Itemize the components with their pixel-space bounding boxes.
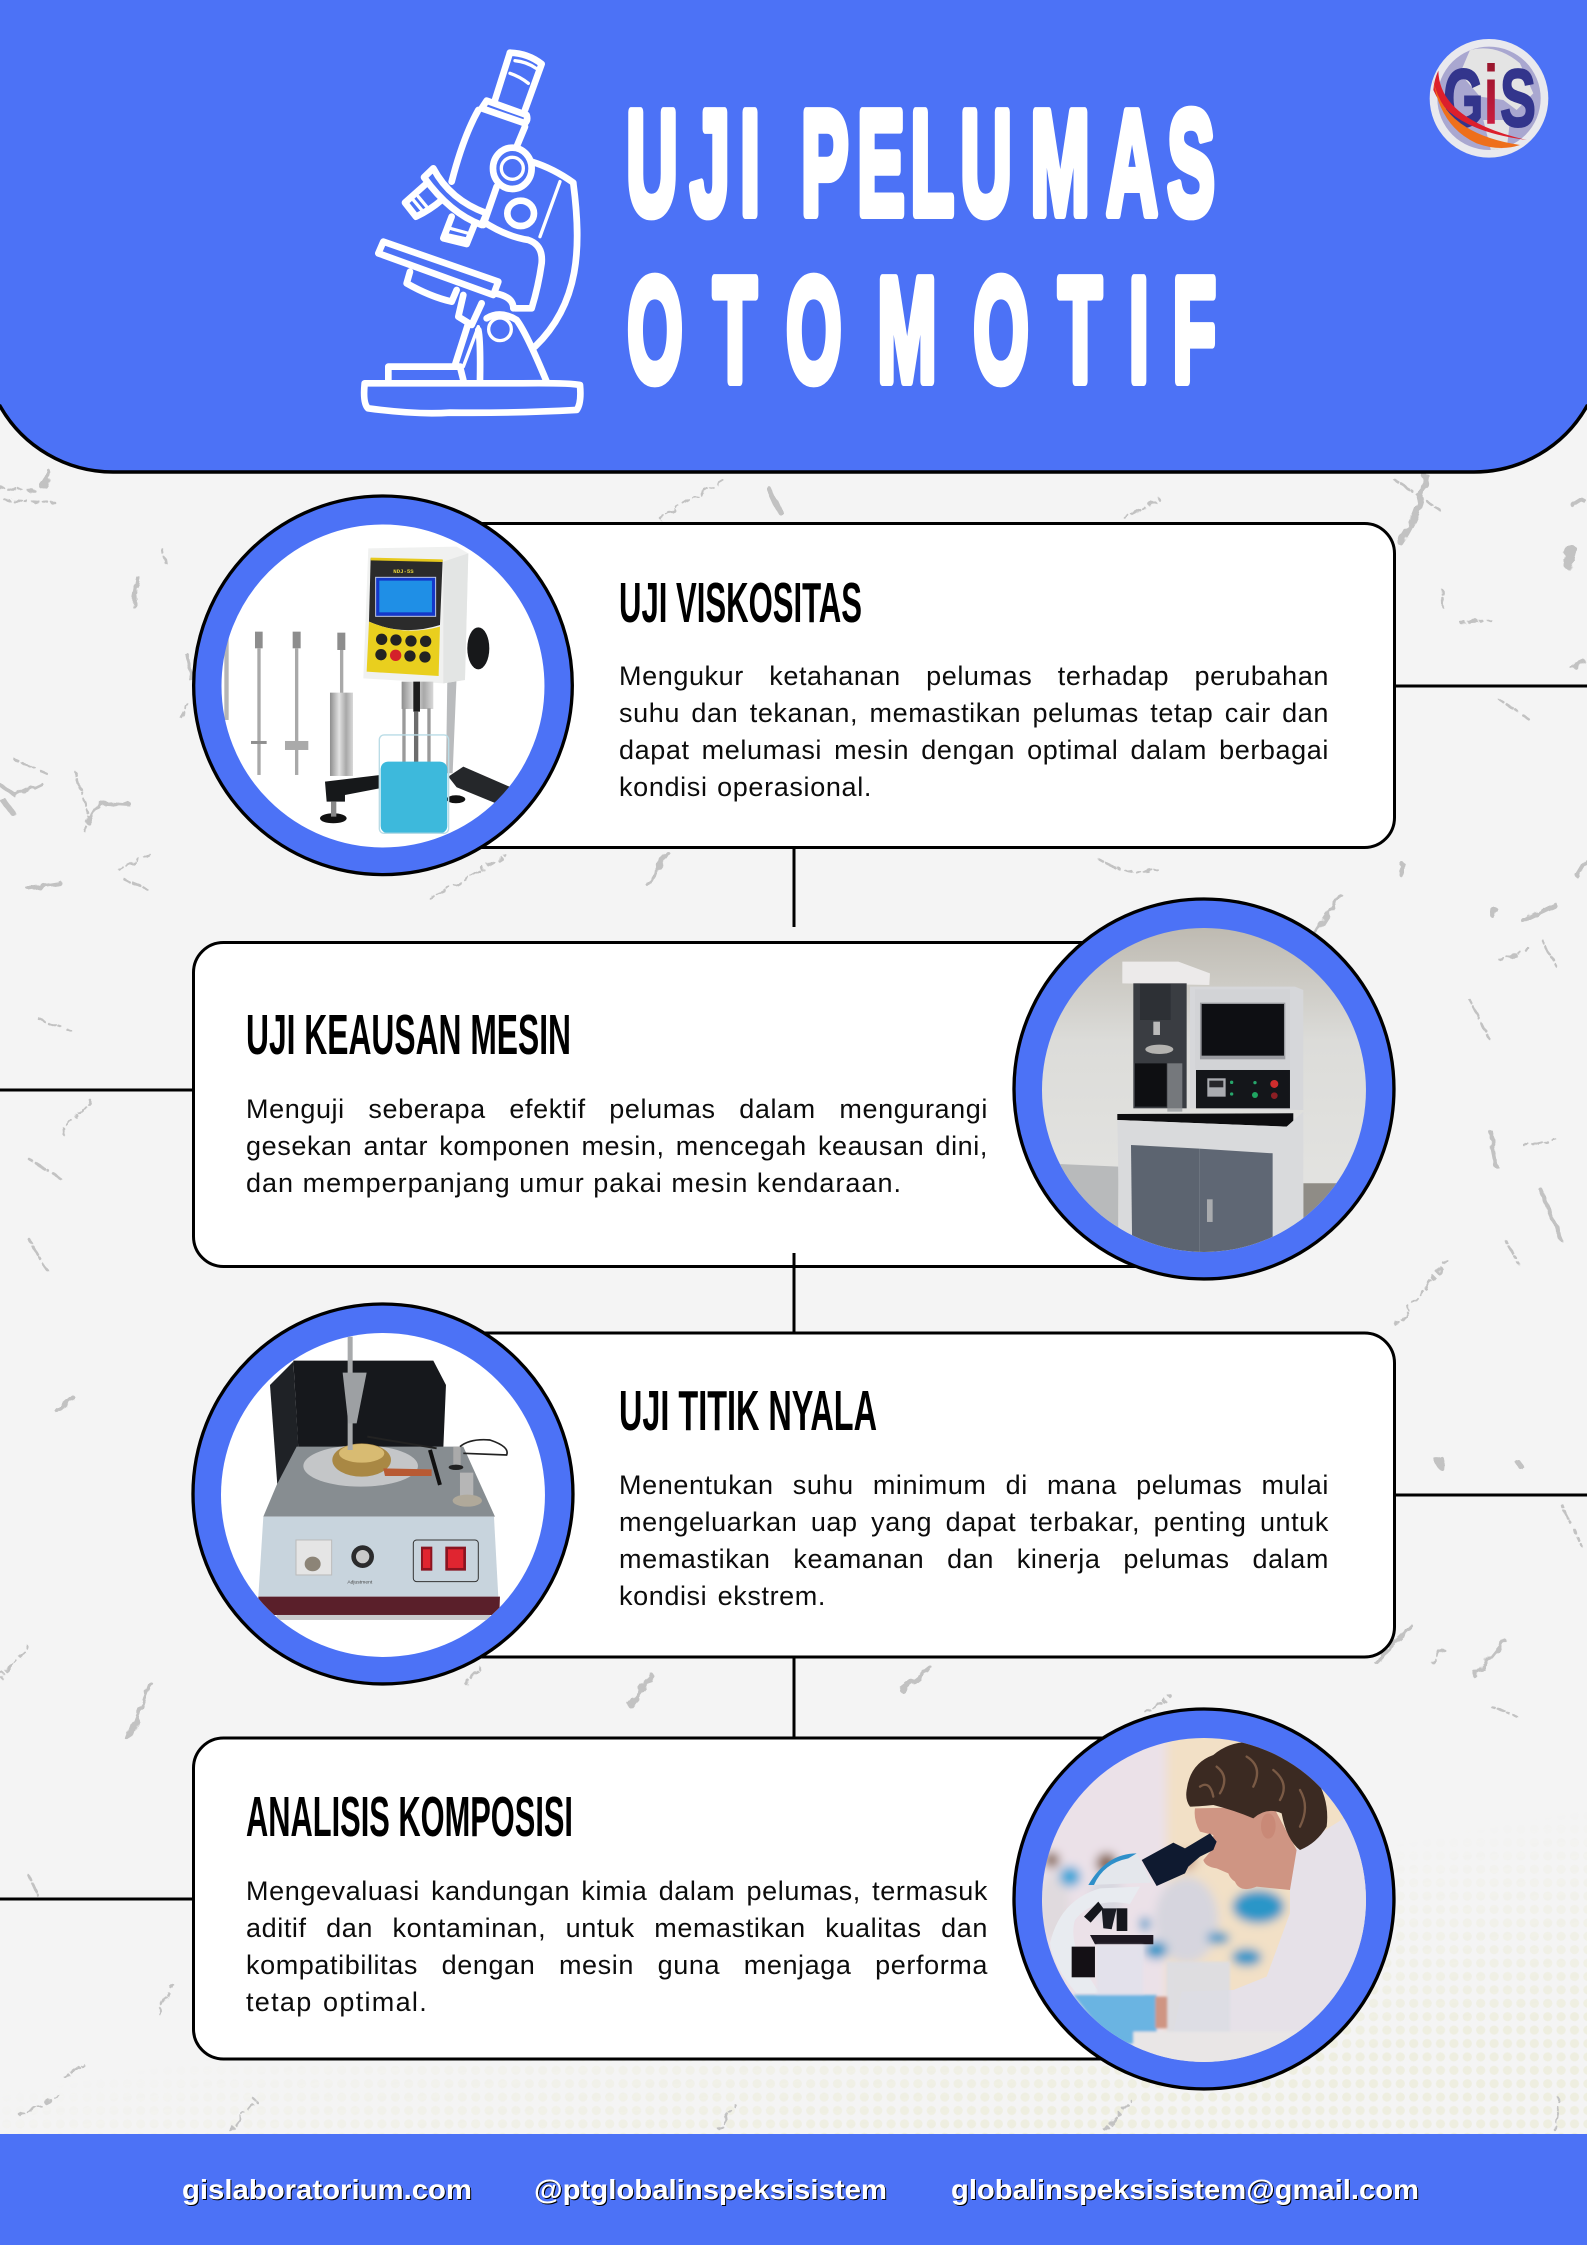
logo: GIS globe	[1430, 39, 1548, 158]
heading: uji keausan mesin: UJI KEAUSAN MESIN	[246, 1003, 571, 1067]
dotted background texture	[192, 1883, 1587, 2134]
photo badge: flash point tester: Adjustment	[347, 1579, 373, 1585]
heading: uji viskositas: UJI VISKOSITAS	[619, 571, 862, 635]
marble crack texture	[0, 474, 1587, 2130]
text block: uji titik nyala description	[619, 1470, 1329, 1611]
photo badge: viscometer: NDJ-5S	[393, 568, 414, 575]
text block: uji keausan mesin description: Menguji seberapa efektif pelumas dalam mengurangi	[246, 1094, 988, 1124]
connector lines: between panels	[792, 848, 796, 1738]
header banner	[0, 0, 1587, 472]
title: UJI PELUMAS OTOMOTIF: UJI PELUMAS	[626, 80, 1215, 246]
photo badge: viscometer	[194, 496, 572, 875]
text block: uji keausan mesin description: gesekan antar komponen mesin, mencegah keausan dini,	[246, 1131, 988, 1161]
title: UJI PELUMAS OTOMOTIF: OTOMOTIF	[627, 247, 1216, 413]
panel: uji keausan mesin card	[194, 942, 1204, 1266]
photo badge: flash point tester	[193, 1304, 573, 1684]
panel: uji viskositas card	[383, 524, 1394, 848]
text block: analisis komposisi description: tetap optimal.	[246, 1987, 428, 2017]
text block: analisis komposisi description	[246, 1876, 988, 2017]
footer contact: website: gislaboratorium.com	[182, 2174, 472, 2205]
footer contact: social handle: @ptglobalinspeksisistem	[534, 2174, 887, 2205]
text block: analisis komposisi description: aditif dan kontaminan, untuk memastikan kualitas dan	[246, 1913, 988, 1943]
footer contact: email: globalinspeksisistem@gmail.com	[951, 2174, 1419, 2205]
title: UJI PELUMAS OTOMOTIF	[626, 80, 1216, 413]
icon: microscope line drawing	[364, 53, 580, 413]
text block: uji viskositas description: Mengukur ketahanan pelumas terhadap perubahan	[619, 661, 1329, 691]
logo: GIS globe: G	[1443, 53, 1483, 144]
text block: uji viskositas description: suhu dan tekanan, memastikan pelumas tetap cair dan	[619, 698, 1329, 728]
text block: uji titik nyala description: mengeluarkan uap yang dapat terbakar, penting untuk	[619, 1507, 1329, 1537]
text block: uji titik nyala description: kondisi ekstrem.	[619, 1581, 826, 1611]
heading: analisis komposisi: ANALISIS KOMPOSISI	[246, 1785, 573, 1849]
text block: uji keausan mesin description: dan memperpanjang umur pakai mesin kendaraan.	[246, 1168, 902, 1198]
text block: analisis komposisi description: Mengevaluasi kandungan kimia dalam pelumas, termasuk	[246, 1876, 988, 1906]
text block: uji viskositas description	[619, 661, 1329, 802]
photo badge: wear test machine	[1014, 899, 1394, 1279]
text block: uji viskositas description: dapat melumasi mesin dengan optimal dalam berbagai	[619, 735, 1329, 765]
logo: GIS globe: S	[1500, 53, 1536, 144]
text block: uji titik nyala description: Menentukan suhu minimum di mana pelumas mulai	[619, 1470, 1329, 1500]
text block: uji keausan mesin description	[246, 1094, 988, 1198]
panel: analisis komposisi card	[194, 1738, 1204, 2059]
photo badge: scientist at microscope	[1014, 1709, 1394, 2089]
panel: uji titik nyala card	[383, 1333, 1394, 1657]
connector lines: panel to page edges	[0, 686, 1587, 1899]
footer bar	[0, 2134, 1587, 2245]
text block: uji viskositas description: kondisi operasional.	[619, 772, 872, 802]
text block: uji titik nyala description: memastikan keamanan dan kinerja pelumas dalam	[619, 1544, 1329, 1574]
heading: uji titik nyala: UJI TITIK NYALA	[619, 1379, 877, 1443]
logo: GIS globe: i	[1483, 48, 1499, 141]
text block: analisis komposisi description: kompatibilitas dengan mesin guna menjaga performa	[246, 1950, 988, 1980]
